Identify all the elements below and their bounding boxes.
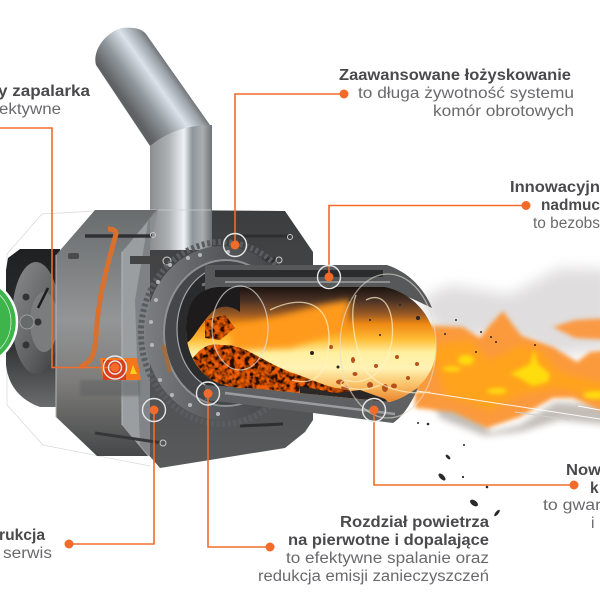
callout: igniter: y zapalarka xyxy=(0,83,90,100)
translucent front plate xyxy=(56,208,171,456)
light streaks xyxy=(404,389,600,419)
callout: air distribution: to efektywne spalanie oraz xyxy=(286,550,489,567)
callout: advanced bearings: komór obrotowych xyxy=(433,103,574,120)
combustion chamber fire xyxy=(186,287,436,402)
callout: innovative blower: Innowacyjn xyxy=(510,179,600,196)
orange body xyxy=(415,311,600,428)
chamber casing xyxy=(205,265,432,423)
callout: modern chamber: i xyxy=(591,515,594,532)
callout: construction: serwis xyxy=(3,545,52,562)
callout: air distribution: redukcja emisji zanieczyszczeń xyxy=(258,568,489,585)
igniter glow xyxy=(100,358,141,380)
callout: modern chamber xyxy=(362,398,600,532)
callout: innovative blower xyxy=(318,179,600,288)
chimney / fuel pipe xyxy=(95,28,212,250)
rear dark plate xyxy=(135,210,313,468)
callout: construction xyxy=(0,398,166,562)
callout: air distribution: Rozdział powietrza xyxy=(340,514,489,531)
callout: modern chamber: Now xyxy=(566,462,600,479)
rods on rear plate xyxy=(240,234,292,426)
yellow hot spots xyxy=(443,350,600,399)
callout: advanced bearings: to długa żywotność systemu xyxy=(358,85,574,102)
smoke xyxy=(420,268,600,355)
callout: air distribution xyxy=(196,382,489,585)
callout: innovative blower: nadmuc xyxy=(541,197,600,214)
gear ring assembly xyxy=(141,242,303,424)
callout: modern chamber: to gwar xyxy=(543,497,600,514)
callout: modern chamber: k xyxy=(590,480,599,497)
dark ash line xyxy=(300,386,388,402)
callout: innovative blower: to bezobs xyxy=(533,215,600,232)
flame xyxy=(404,268,600,436)
glowing pellets bed xyxy=(192,344,350,398)
callout: igniter xyxy=(0,83,126,379)
callout: construction: rukcja xyxy=(0,527,45,544)
spiral air coils xyxy=(212,274,436,418)
wireframe plate outline xyxy=(7,211,150,466)
callout: advanced bearings xyxy=(224,67,574,256)
pellets xyxy=(329,345,419,392)
callout: advanced bearings: Zaawansowane łożyskowanie xyxy=(339,67,571,84)
burner motor xyxy=(6,249,60,407)
callout: air distribution: na pierwotne i dopalające xyxy=(288,532,489,549)
orange fuel hose xyxy=(80,229,116,367)
falling ash particles xyxy=(417,319,536,517)
callout: igniter: ektywne xyxy=(0,101,61,118)
green badge xyxy=(0,278,17,366)
